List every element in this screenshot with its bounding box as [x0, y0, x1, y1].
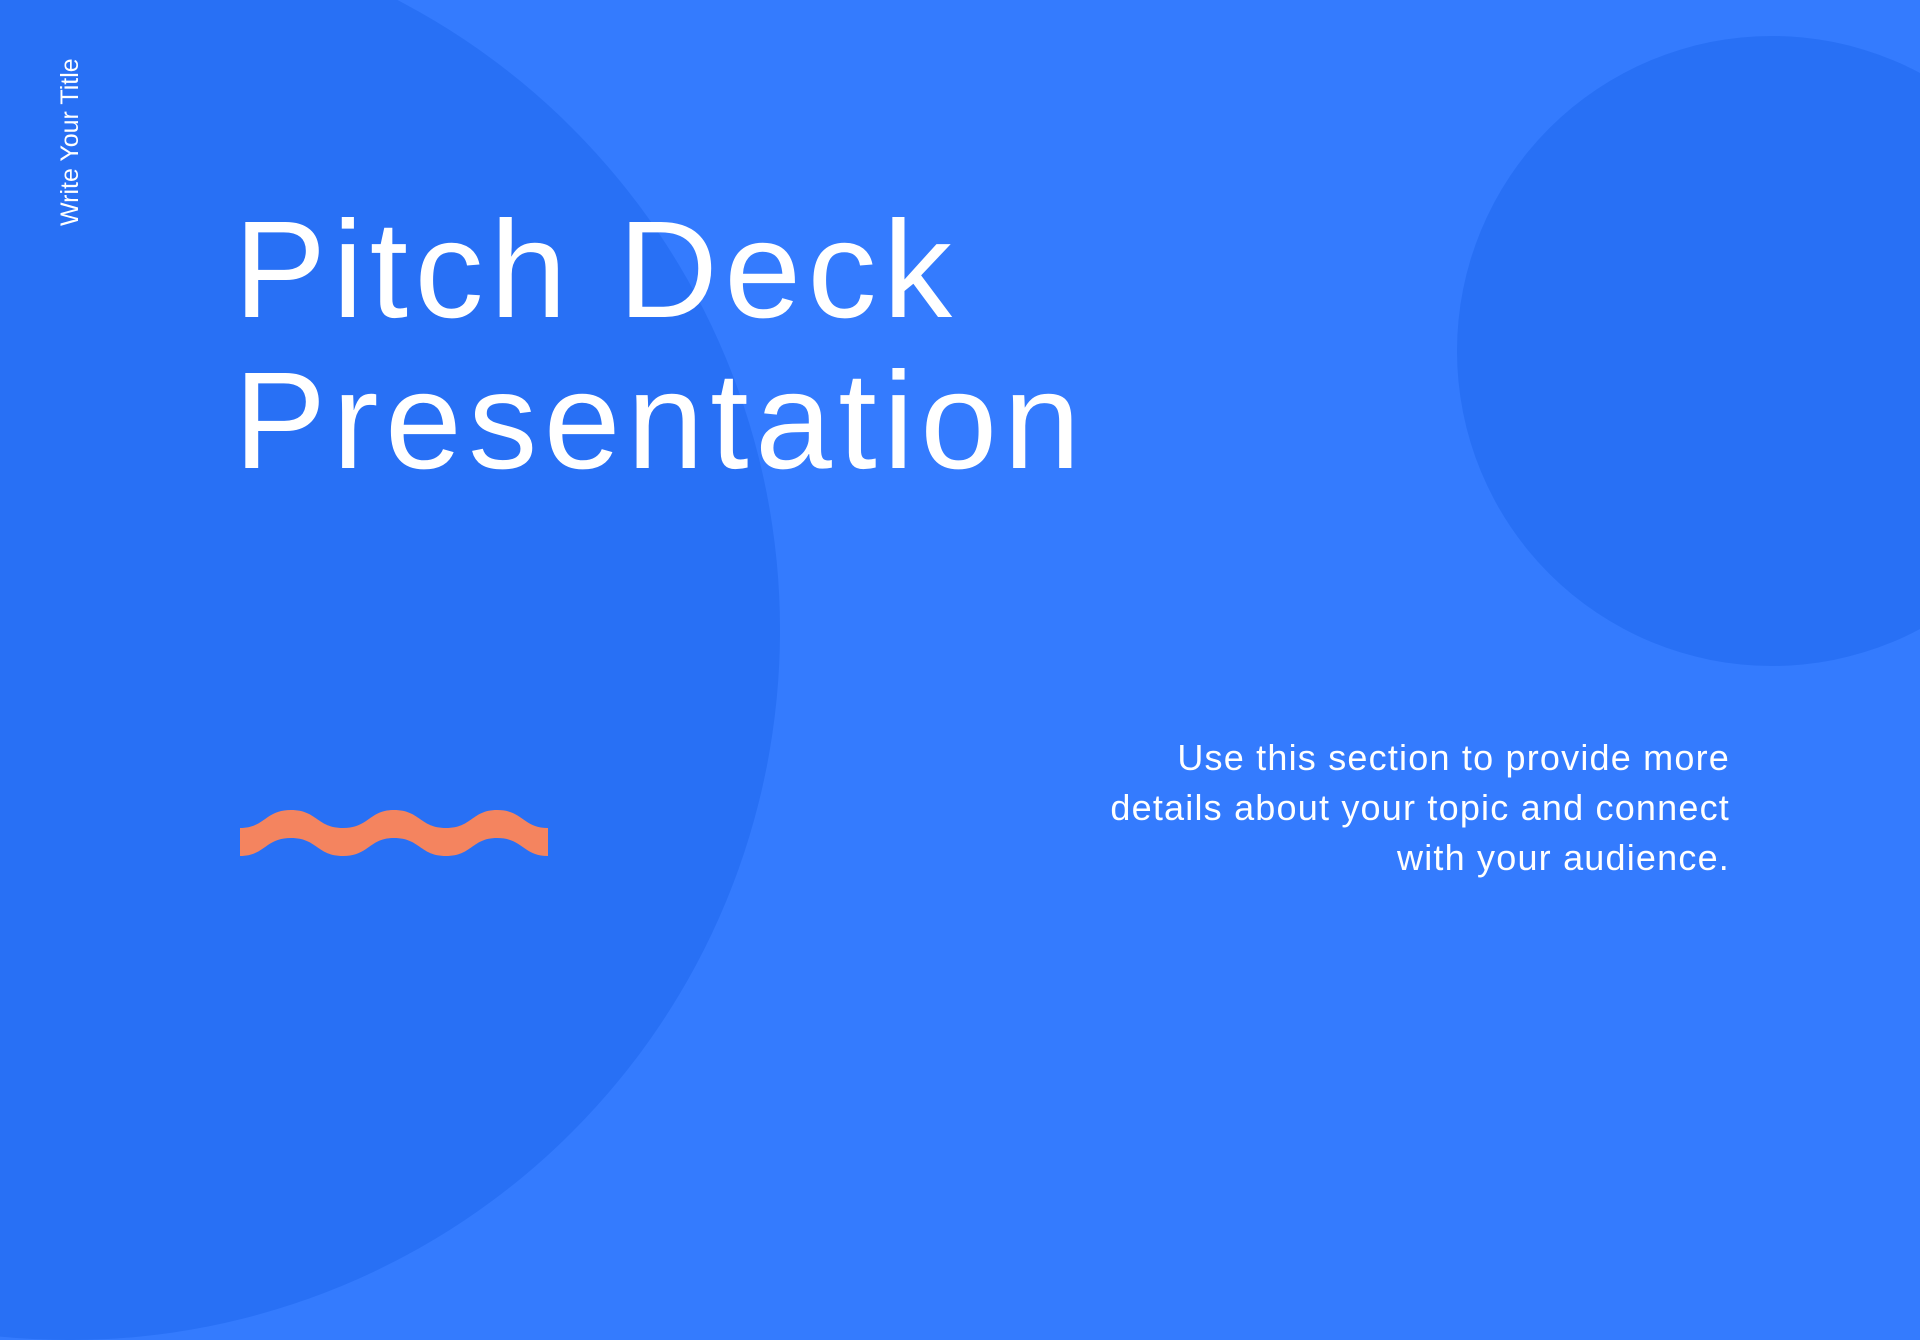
vertical label: Write Your Title: [56, 58, 84, 226]
icon: orange wave: [240, 810, 548, 856]
title: Pitch Deck: [234, 193, 959, 347]
title: Presentation: [234, 344, 1087, 498]
background circle: top right: [1457, 36, 1920, 666]
description text: details about your topic and connect: [1110, 787, 1730, 828]
title: [234, 193, 1087, 498]
description text: [1110, 737, 1730, 878]
background circle: large left: [0, 0, 780, 1340]
description text: Use this section to provide more: [1177, 737, 1730, 778]
description text: with your audience.: [1397, 837, 1730, 878]
